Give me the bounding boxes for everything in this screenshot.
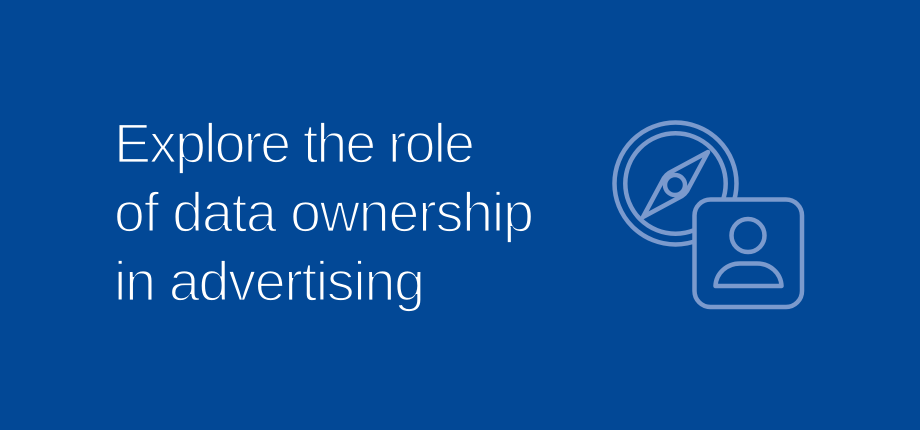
title: of data ownership (114, 182, 534, 244)
icon: compass (614, 122, 736, 244)
title: in advertising (114, 250, 425, 312)
icon: user card (694, 200, 802, 307)
icon: compass and user profile (614, 122, 802, 307)
title (114, 112, 534, 312)
title: Explore the role (114, 112, 475, 174)
